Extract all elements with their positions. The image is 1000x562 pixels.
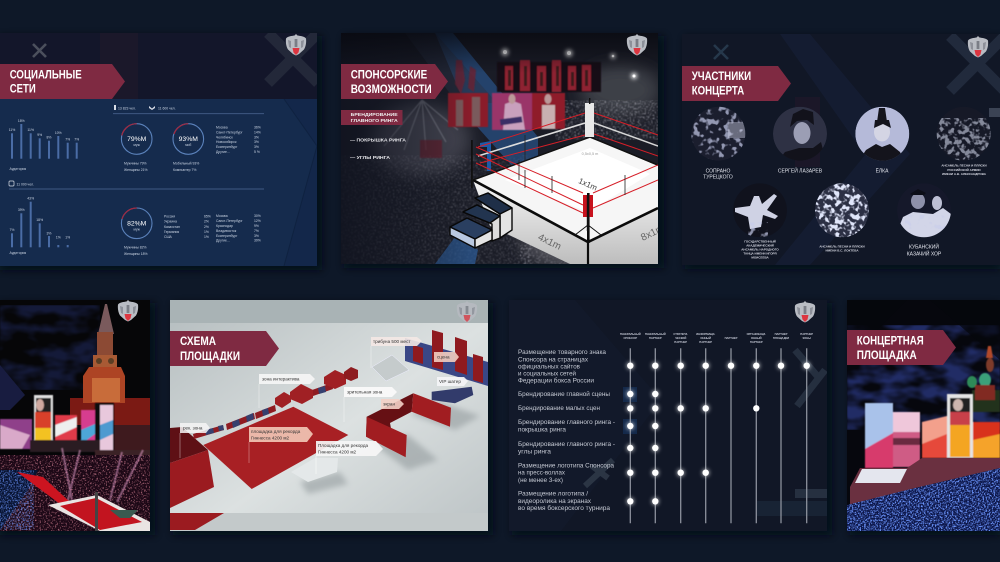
bar chart: audience two: 1% — [65, 236, 70, 240]
table: cities two: 9% — [254, 224, 259, 228]
ring chart: 82%: 82%M — [127, 220, 147, 228]
bar chart: audience one: 18% — [18, 119, 25, 123]
heading: concert participants: КОНЦЕРТА — [692, 86, 744, 98]
caption: Yolka: ЁЛКА — [876, 168, 889, 174]
column headers: ПАРТНЕР — [674, 340, 687, 344]
blue diagonal band — [435, 33, 538, 177]
table: cities one: Челябинск — [216, 135, 233, 139]
column headers: СПОНСОР — [623, 336, 637, 340]
table: countries: 1% — [204, 230, 209, 234]
decorative x mark small — [714, 45, 728, 59]
matrix dots — [627, 362, 810, 504]
ring chart: 82% — [121, 208, 152, 256]
label: VIP — [437, 377, 468, 386]
label: spectator zone — [344, 387, 397, 422]
label: record area two: Площадка для рекорда — [318, 443, 369, 448]
row labels: Спонсора на страницах — [518, 356, 589, 364]
panel: kremlin photo — [0, 300, 150, 531]
panel: concert venue — [847, 300, 1000, 531]
ring chart: 82%: муж — [134, 228, 141, 232]
portrait: Alexandrov ensemble — [936, 107, 991, 161]
row labels: во время боксерского турнира — [518, 504, 610, 512]
panel: sponsor opportunities — [341, 33, 658, 264]
bar chart: audience one: 10% — [55, 131, 62, 135]
bar chart: audience one: 9% — [37, 133, 42, 137]
bar chart: audience one: 11% — [27, 128, 34, 132]
row labels: видеоролика на экранах — [518, 498, 592, 505]
striped bars — [193, 383, 333, 439]
table: cities one: Санкт-Петербург — [216, 130, 243, 134]
spasskaya tower — [83, 304, 125, 403]
decorative diagonals — [775, 34, 910, 265]
label: VIP: VIP шатер — [439, 379, 461, 384]
caption: Alexandrov ensemble: ИМЕНИ А.В. АЛЕКСАНДРОВА — [942, 172, 987, 176]
portrait: Kuban Cossack choir — [897, 183, 955, 240]
crowd — [341, 155, 531, 264]
ring chart: 79%: муж — [134, 143, 141, 147]
portrait: Loktev ensemble — [815, 183, 869, 238]
caption: Loktev ensemble: АНСАМБЛЬ ПЕСНИ И ПЛЯСКИ — [819, 244, 865, 248]
table: cities two: 39% — [254, 239, 261, 243]
ring chart: 79%: 79%M — [127, 136, 147, 143]
caption: Loktev ensemble — [819, 244, 865, 252]
column headers: ОННЫЙ — [700, 336, 711, 340]
table: cities one — [216, 126, 261, 154]
illustration: boxing ring — [450, 98, 666, 264]
list: ring cover: — ПОКРЫШКА РИНГА — [350, 138, 407, 142]
column headers: СТРАТЕГИ- — [673, 332, 688, 336]
follower counts top — [114, 105, 176, 110]
row labels: покрышка ринга — [518, 426, 566, 433]
portrait: Yolka — [855, 107, 909, 164]
ring posts — [585, 103, 594, 137]
ring chart: 93%: Мобильный 93% — [173, 162, 199, 166]
upper red banners — [455, 60, 601, 94]
caption: Moiseyev ensemble — [741, 240, 779, 260]
caption: Alexandrov ensemble: АНСАМБЛЬ ПЕСНИ И ПЛЯСКИ — [941, 164, 987, 168]
row labels: Размещение товарного знака — [518, 349, 606, 356]
bar chart: audience one: 7% — [74, 138, 79, 142]
label: zone interactive — [259, 374, 315, 408]
column headers: ОРГАНИЗАЦИ- — [747, 332, 766, 336]
panel: sponsorship matrix — [509, 300, 827, 531]
ring chart: 93%: 93%M — [179, 136, 198, 143]
bar chart: audience one: 8% — [47, 136, 51, 140]
decorative x mark small — [33, 44, 46, 57]
bar chart: audience one — [9, 119, 79, 171]
caption: Moiseyev ensemble: ТАНЦА ИМЕНИ ИГОРЯ — [743, 251, 777, 255]
red carpet — [17, 472, 70, 504]
panel: social networks — [0, 33, 318, 266]
column headers: ПАРТНЕР — [649, 336, 662, 340]
mat labels: 0,5x0,5 m — [582, 152, 598, 156]
ring chart: 82%: Женщины 18% — [124, 252, 148, 256]
caption: Kuban Cossack choir — [907, 242, 942, 258]
panel: concert participants — [682, 34, 1000, 265]
boxing ring — [48, 492, 150, 531]
row labels: официальных сайтов — [518, 362, 580, 370]
ring steps — [450, 193, 512, 248]
row labels — [518, 349, 615, 512]
heading: concert participants — [682, 66, 791, 101]
left red box — [170, 427, 214, 508]
caption: Turetsky soprano: СОПРАНО — [706, 168, 731, 174]
table: cities two — [216, 214, 261, 243]
heading: sponsor opportunities — [341, 64, 448, 99]
column headers: ЗОНЫ — [803, 336, 811, 340]
table: cities two: 30% — [254, 214, 261, 218]
table: countries: 2% — [204, 225, 209, 229]
icon: crest — [118, 300, 138, 322]
table: cities two: Санкт-Петербург — [216, 219, 243, 223]
fade over left side — [341, 93, 460, 264]
table: cities two: Москва — [216, 214, 228, 218]
bottom band — [170, 513, 488, 531]
heading: venue scheme: ПЛОЩАДКИ — [180, 351, 240, 363]
follower counts top: 13 823 чел. — [118, 106, 136, 110]
caption: Alexandrov ensemble: РОССИЙСКОЙ АРМИИ — [947, 168, 981, 172]
white block — [291, 458, 338, 482]
portrait: Turetsky soprano — [691, 106, 746, 161]
bar chart: audience one: 7% — [65, 138, 70, 142]
panel: venue scheme — [170, 300, 488, 531]
row labels: на пресс-воллах — [518, 470, 566, 477]
table: cities one: 3% — [254, 135, 259, 139]
dots glow — [627, 362, 810, 505]
table: cities one: 3% — [254, 145, 259, 149]
table: cities one: Москва — [216, 126, 228, 130]
column headers: ПАРТНЕР — [750, 340, 763, 344]
column headers: ПЛОЩАДКИ — [773, 336, 789, 340]
caption: Kuban Cossack choir: КАЗАЧИЙ ХОР — [907, 250, 942, 258]
caption: Moiseyev ensemble: АНСАМБЛЬ НАРОДНОГО — [741, 247, 779, 251]
heading: social networks: СОЦИАЛЬНЫЕ — [10, 69, 82, 81]
night clouds — [0, 305, 100, 390]
bar chart: audience two: 43% — [27, 196, 34, 200]
table: cities one: 3% — [254, 140, 259, 144]
table: cities one: Другие... — [216, 150, 230, 154]
bar chart: audience two: 18% — [36, 218, 43, 222]
caption: Alexandrov ensemble — [941, 164, 987, 176]
portrait: Moiseyev ensemble — [733, 183, 787, 237]
label: spectator zone: зрительная зона — [347, 390, 383, 394]
grandstand — [372, 355, 409, 381]
label: ad zone: рек. зона — [183, 426, 203, 430]
heading: venue scheme: СХЕМА — [180, 336, 216, 348]
blue data area — [0, 99, 317, 266]
arena haze — [372, 60, 658, 264]
table: cities two: 7% — [254, 229, 259, 233]
table: cities one: Екатеринбург — [216, 145, 238, 149]
label: stage: сцена — [437, 354, 450, 360]
heading: concert venue: КОНЦЕРТНАЯ — [857, 335, 924, 347]
table: countries: Казахстан — [164, 225, 180, 229]
ring chart: 93%: моб — [185, 143, 191, 147]
label: grandstand: трибуна 500 мест — [373, 339, 411, 344]
caption: Loktev ensemble: ИМЕНИ В.С. ЛОКТЕВА — [825, 248, 859, 252]
heading: sponsor opportunities: ВОЗМОЖНОСТИ — [351, 84, 432, 96]
table: cities two: 12% — [254, 219, 261, 223]
icon: crest — [627, 34, 647, 56]
table: countries: Германия — [164, 230, 179, 234]
stage base — [850, 458, 1000, 505]
dark diagonal — [424, 45, 492, 103]
bar chart: audience one: Аудитория — [10, 167, 26, 171]
label: screen: экран — [383, 402, 395, 406]
label: ad zone — [180, 423, 210, 458]
red cubes — [275, 367, 358, 408]
decorative x mark — [585, 460, 613, 486]
ring chart: 93%: Компьютер 7% — [173, 168, 196, 172]
row labels: Размещение логотипа / — [518, 491, 588, 498]
column headers: ГЕНЕРАЛЬНЫЙ — [620, 332, 641, 336]
red guinness square — [203, 407, 348, 489]
row labels: Брендирование главного ринга - — [518, 441, 615, 448]
ring skirt — [473, 180, 658, 264]
decorative x mark large — [950, 36, 1000, 91]
table: cities one: Новосибирск — [216, 140, 237, 144]
bar chart: audience two — [10, 196, 70, 255]
row labels: (не менее 3-ех) — [518, 477, 563, 484]
column headers — [620, 332, 813, 344]
label: grandstand — [371, 337, 422, 368]
ring chart: 93% — [173, 124, 204, 172]
bar chart: audience two: 7% — [10, 228, 14, 232]
table: countries: США — [164, 235, 173, 239]
heading: sponsor opportunities: СПОНСОРСКИЕ — [351, 70, 427, 82]
bar chart: audience two: Аудитория — [10, 251, 26, 255]
column headers: ПАРТНЕР — [775, 332, 788, 336]
row labels: и социальных сетей — [518, 370, 576, 378]
table: cities one: 5 % — [254, 150, 260, 154]
column headers: ПАРТНЕР — [725, 336, 738, 340]
label: record area: площадка для рекорда — [251, 429, 301, 434]
heading: social networks — [0, 64, 125, 99]
heading: venue scheme — [170, 331, 279, 366]
table: cities one: 36% — [254, 126, 261, 130]
label: stage — [434, 352, 459, 362]
caption: Turetsky soprano — [703, 168, 733, 181]
bar chart: audience one: 11% — [9, 128, 15, 132]
kremlin wall — [70, 398, 150, 425]
heading: concert venue — [847, 330, 956, 365]
table: countries: Украина — [164, 220, 177, 224]
table: countries — [164, 214, 211, 239]
row labels: углы ринга — [518, 449, 551, 456]
ring chart: 79%: Мужчины 79% — [124, 162, 147, 166]
crowd — [847, 460, 1000, 531]
caption: Moiseyev ensemble: ГОСУДАРСТВЕННЫЙ — [744, 240, 776, 244]
table: cities two: Владивосток — [216, 229, 237, 233]
column headers: ОННЫЙ — [751, 336, 762, 340]
heading: concert venue: ПЛОЩАДКА — [857, 350, 917, 362]
row labels: Брендирование главного ринга - — [518, 419, 615, 426]
sub heading: ring branding — [341, 110, 402, 125]
lower posters — [420, 93, 565, 158]
heading: social networks: СЕТИ — [10, 84, 36, 96]
stage lights — [502, 48, 637, 79]
icon: crest — [968, 36, 988, 58]
column headers: ИНФОРМАЦИ- — [696, 332, 715, 336]
column headers: ГЕНЕРАЛЬНЫЙ — [645, 332, 666, 336]
light beams — [384, 100, 458, 150]
column lines — [630, 348, 807, 523]
row labels: Брендирование малых сцен — [518, 405, 600, 412]
table: cities two: Екатеринбург — [216, 234, 238, 238]
bottom red corner — [170, 513, 224, 530]
night clouds — [847, 325, 1000, 430]
caption: Moiseyev ensemble: МОИСЕЕВА — [751, 256, 770, 260]
saint basil cathedral — [967, 346, 1000, 412]
table: cities two: 3% — [254, 234, 259, 238]
bar chart: audience two: 1% — [56, 236, 61, 240]
follower count lower — [9, 181, 34, 186]
floor shadows — [300, 402, 480, 494]
label: record area two — [316, 441, 383, 474]
list: ring corners: — УГЛЫ РИНГА — [350, 155, 391, 160]
icon: crest — [795, 301, 815, 322]
stage screens — [0, 395, 150, 456]
illustration: boxing ring: 1x1m — [577, 176, 599, 193]
follower count lower: 11 000 чел. — [16, 182, 34, 186]
sub heading: ring branding: БРЕНДИРОВАНИЕ — [351, 112, 398, 117]
column headers: ПАРТНЕР — [800, 332, 813, 336]
row labels: Федерации бокса России — [518, 376, 594, 384]
label: record area — [249, 427, 313, 463]
ropes — [476, 113, 658, 213]
heading: concert participants: УЧАСТНИКИ — [692, 71, 751, 83]
caption: Kuban Cossack choir: КУБАНСКИЙ — [909, 242, 939, 250]
label: record area two: Гиннесса 4200 м2 — [318, 450, 357, 454]
table: cities two: Другие... — [216, 239, 230, 243]
decorative x mark large — [268, 33, 318, 83]
bar chart: audience two: 39% — [18, 208, 25, 212]
table: countries: 65% — [204, 214, 211, 218]
ring edge — [473, 180, 658, 242]
caption: Turetsky soprano: ТУРЕЦКОГО — [703, 175, 733, 181]
label: zone interactive: зона интерактива — [262, 376, 300, 382]
caption: Sergey Lazarev: СЕРГЕЙ ЛАЗАРЕВ — [778, 166, 823, 174]
stage structure — [405, 330, 488, 403]
label: screen — [381, 399, 404, 409]
ring chart: 79% — [121, 124, 152, 172]
caption: Moiseyev ensemble: АКАДЕМИЧЕСКИЙ — [746, 244, 774, 248]
table: countries: Россия — [164, 214, 175, 218]
label: record area: Гиннесса 4200 м2 — [251, 436, 290, 440]
icon: crest — [457, 301, 477, 322]
column headers: ЧЕСКИЙ — [675, 336, 686, 340]
ring chart: 79%: Женщины 21% — [124, 168, 148, 172]
table: cities one: 14% — [254, 130, 261, 134]
spotlight beams — [62, 448, 143, 502]
illustration: boxing ring: 8x1m — [639, 223, 666, 244]
row labels: Размещение логотипа Спонсора — [518, 462, 614, 470]
red u-shaped wall — [366, 393, 451, 457]
crowd — [0, 455, 150, 531]
follower counts top: 11 600 чел. — [158, 106, 176, 110]
table: countries: 1% — [204, 235, 209, 239]
column headers: ПАРТНЕР — [699, 340, 712, 344]
portrait: Sergey Lazarev — [773, 107, 827, 165]
sub heading: ring branding: ГЛАВНОГО РИНГА — [351, 118, 399, 123]
illustration: boxing ring: 4x1m — [536, 232, 563, 253]
top band — [170, 300, 488, 323]
icon: crest — [286, 34, 306, 56]
ring chart: 82%: Мужчины 82% — [124, 246, 147, 250]
table: countries: 2% — [204, 220, 209, 224]
row labels: Брендирование главной сцены — [518, 390, 610, 398]
stage screens — [865, 394, 1000, 468]
table: cities two: Краснодар — [216, 224, 233, 228]
bar chart: audience two: 3% — [47, 232, 51, 236]
